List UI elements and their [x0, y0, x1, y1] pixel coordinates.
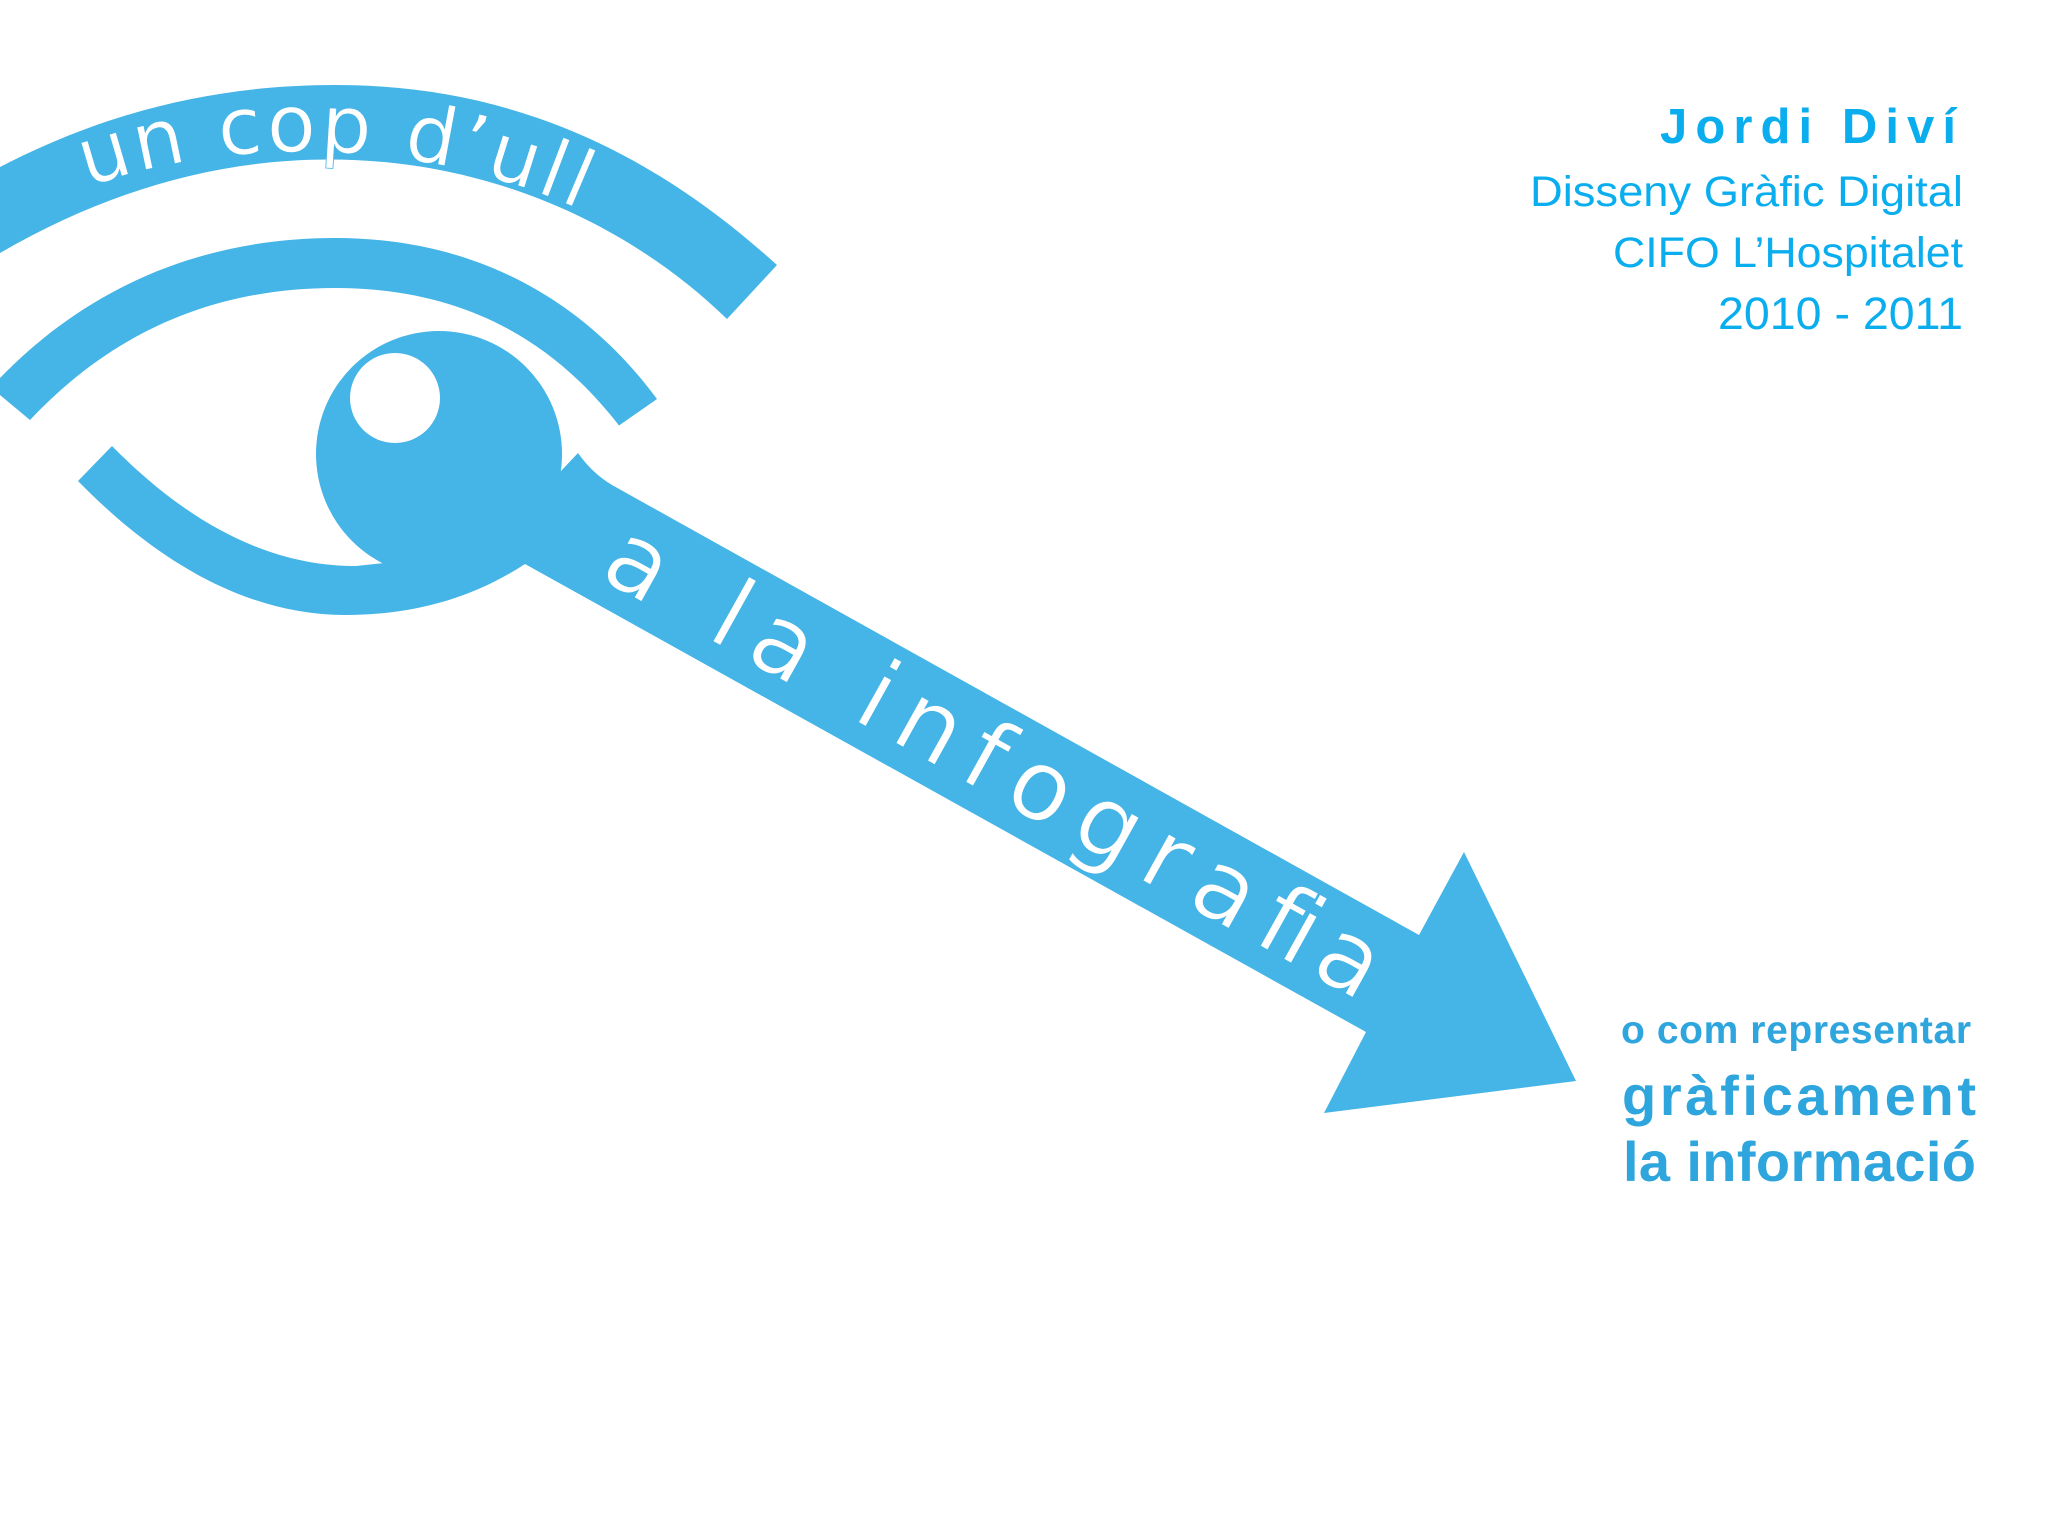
- author name: Jordi Diví: [1660, 100, 1957, 154]
- tagline first line: o com representar: [1621, 1009, 1971, 1052]
- tagline second line: gràficament: [1622, 1064, 1976, 1127]
- icon: eye with arched brows: [0, 85, 777, 615]
- iris with highlight: [316, 331, 562, 577]
- title: un cop d'ull: un cop d’ull: [81, 105, 596, 206]
- tagline third line: la informació: [1623, 1130, 1976, 1193]
- author credits: [1530, 100, 1963, 339]
- arrow with subtitle: [470, 453, 1576, 1113]
- lower eyelid arc: [78, 446, 525, 615]
- tagline: [1621, 1009, 1976, 1193]
- course line: Disseny Gràfic Digital: [1530, 168, 1963, 216]
- outer arc with title: [0, 85, 777, 319]
- school line: CIFO L’Hospitalet: [1613, 229, 1963, 277]
- subtitle: a la infografia: a la infografia: [585, 498, 1418, 1031]
- middle eyelid arc: [0, 238, 657, 426]
- arrow shape: [470, 453, 1576, 1113]
- years line: 2010 - 2011: [1718, 288, 1963, 339]
